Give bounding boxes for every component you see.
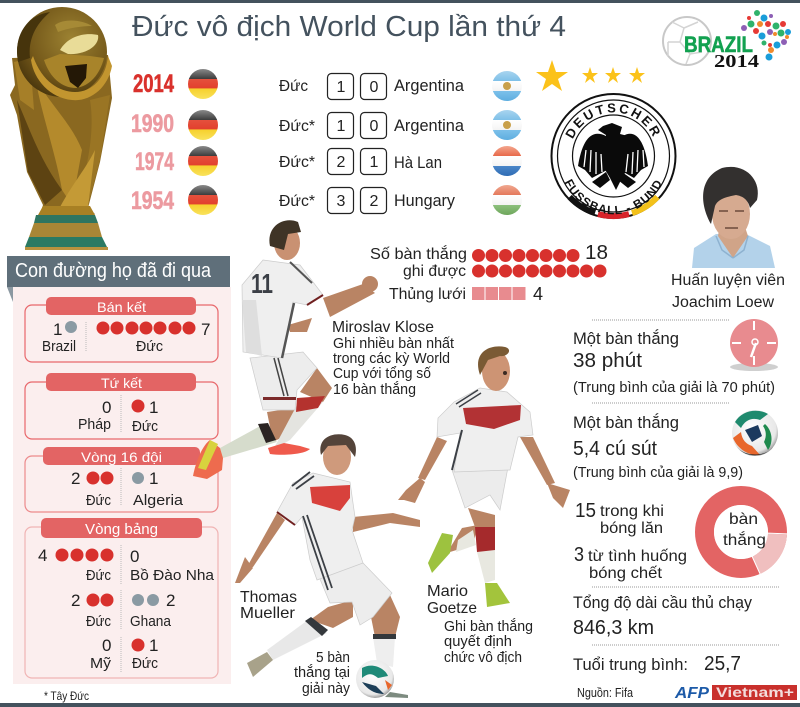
coach caption (671, 272, 785, 311)
stat: shots per goal: Một bàn thắng (573, 413, 679, 432)
2014 (133, 69, 218, 99)
semi-final: 1 (53, 320, 62, 339)
goals scored and conceded: ghi được (403, 263, 466, 280)
final 1974: 1 (370, 154, 379, 171)
photo: Miroslav Klose (193, 220, 378, 479)
group stage: 0 (130, 547, 139, 566)
goals total: 18 (585, 242, 608, 264)
round of 16: 1 (149, 469, 158, 488)
semi-final: Bán kết (97, 299, 146, 315)
round of 16: Algeria (133, 492, 184, 509)
panel heading: Con đường họ đã đi qua (15, 260, 212, 282)
conceded total: 4 (533, 284, 543, 304)
stat: minutes per goal: 38 phút (573, 349, 642, 372)
icon: stars (536, 60, 645, 91)
Klose caption: Ghi nhiều bàn nhất (333, 335, 455, 352)
final 2014 (279, 71, 522, 101)
donut chart: thắng (723, 530, 766, 549)
stat: shots per goal (573, 410, 778, 481)
goals label: Số bàn thắng (370, 244, 467, 263)
stat: minutes per goal: (Trung bình của giải là 70 phút) (573, 379, 775, 396)
Mueller caption (240, 589, 350, 697)
icon: World Cup trophy (10, 7, 112, 250)
stat: minutes per goal: Một bàn thắng (573, 329, 679, 348)
final 1990 (279, 110, 522, 140)
Goetze caption: Mario (427, 583, 468, 600)
footnote: * Tây Đức (44, 689, 89, 703)
stat: open play and set piece goals (574, 496, 790, 582)
Klose caption: Miroslav Klose (332, 319, 434, 336)
Goetze caption (427, 583, 533, 666)
title: Đức vô địch World Cup lần thứ 4 (132, 11, 566, 43)
donut chart (704, 496, 790, 576)
logo: AFP Vietnam+: Vietnam+ (716, 684, 794, 700)
icon: Brazuca ball (732, 410, 778, 456)
icon: Brazil 2014 logo: 2014 (714, 51, 759, 71)
final 1990: 1 (337, 118, 346, 135)
Mueller caption: giải này (302, 680, 350, 697)
goals scored and conceded (370, 242, 608, 304)
group stage: Bồ Đào Nha (130, 567, 215, 584)
stat: shots per goal: 5,4 cú sút (573, 437, 657, 460)
1974 (135, 146, 218, 176)
stat: average age (573, 653, 741, 675)
group stage: 2 (166, 591, 175, 610)
Klose caption: Cup với tổng số (333, 365, 432, 382)
round of 16: Vòng 16 đội (81, 449, 162, 465)
1990 (131, 110, 218, 140)
top bar (0, 0, 800, 3)
final 1954: Hungary (394, 192, 456, 210)
group stage: Đức (86, 567, 111, 584)
semi-final: Đức (136, 338, 163, 355)
logo: AFP Vietnam+ (674, 684, 797, 702)
group stage: 4 (38, 546, 47, 565)
group stage: Vòng bảng (85, 521, 158, 538)
final results table (279, 71, 522, 215)
icon: Brazil 2014 logo (663, 10, 791, 71)
stat: total distance: 846,3 km (573, 617, 654, 639)
final 2014: 0 (370, 79, 379, 96)
final 1974: Đức* (279, 154, 315, 171)
icon: Brazil 2014 logo: BRAZIL (684, 32, 753, 57)
quarter-final: 0 (102, 398, 111, 417)
bottom bar (0, 703, 800, 707)
stat: shots per goal: (Trung bình của giải là 9,9) (573, 464, 743, 481)
stat: open play and set piece goals: từ tình huống (588, 548, 687, 565)
group stage: Đức (132, 655, 158, 672)
quarter-final: Đức (132, 418, 158, 435)
icon: stopwatch (730, 319, 778, 371)
final 1954 (279, 185, 522, 215)
stat: average age: 25,7 (704, 653, 741, 675)
Goetze caption: Goetze (427, 600, 477, 617)
panel background (13, 287, 231, 684)
coach caption: Huấn luyện viên (671, 272, 785, 289)
round of 16: 2 (71, 469, 80, 488)
final 1954: 3 (337, 193, 346, 210)
final 1990: Argentina (394, 117, 465, 135)
final 1954: 2 (370, 193, 379, 210)
Mueller caption: Thomas (240, 589, 297, 606)
round of 16: Đức (86, 492, 111, 509)
photo: coach Joachim Loew (692, 167, 775, 268)
stat: open play and set piece goals: 15 (575, 500, 596, 522)
Klose caption: 16 bàn thắng (333, 381, 416, 398)
final 2014: Argentina (394, 77, 465, 95)
Goetze caption: Ghi bàn thắng (444, 618, 533, 635)
quarter-final (25, 373, 218, 439)
group stage: Đức (86, 613, 111, 630)
panel heading (7, 256, 230, 302)
semi-final: 7 (201, 320, 210, 339)
stat: open play and set piece goals: bóng lăn (600, 520, 663, 537)
final 1990: Đức* (279, 118, 315, 135)
quarter-final: Pháp (78, 416, 111, 433)
Goetze caption: chức vô địch (444, 649, 522, 666)
semi-final: Brazil (42, 338, 76, 355)
icon: DFB crest: DEUTSCHER (565, 103, 660, 139)
stat: open play and set piece goals: trong khi (600, 503, 664, 520)
group stage (25, 518, 218, 678)
goal dots (472, 249, 606, 278)
group stage: Ghana (130, 613, 172, 630)
final 1974: 2 (337, 154, 346, 171)
final 2014: Đức (279, 78, 308, 95)
semi-final (25, 297, 218, 362)
conceded label: Thủng lưới (389, 286, 466, 303)
stat: open play and set piece goals: bóng chết (589, 565, 663, 582)
stat: average age: Tuổi trung bình: (573, 656, 688, 674)
group stage: Mỹ (90, 655, 112, 672)
Mueller caption: Mueller (240, 605, 296, 622)
Klose caption: trong các kỳ World (333, 350, 450, 367)
donut chart: bàn (729, 511, 758, 528)
years with German flags (131, 69, 218, 215)
1954: 1954 (131, 187, 174, 215)
logo: AFP Vietnam+: AFP (674, 685, 709, 702)
stat: minutes per goal (573, 319, 778, 396)
photo: Thomas Mueller (235, 434, 420, 698)
panel: road to the final (7, 256, 231, 684)
final 1974: Hà Lan (394, 154, 442, 172)
photo: Mario Goetze (398, 346, 570, 607)
coach caption: Joachim Loew (672, 294, 775, 311)
1954 (131, 185, 218, 215)
group stage: 2 (71, 591, 80, 610)
icon: DFB crest: FUSSBALL - BUND (565, 178, 661, 214)
final 1954: Đức* (279, 193, 315, 210)
stat: total distance (573, 594, 753, 639)
1990: 1990 (131, 110, 174, 138)
Goetze caption: quyết định (444, 633, 512, 650)
photo: Miroslav Klose: 11 (251, 268, 273, 299)
source: Nguồn: Fifa (577, 686, 633, 700)
1974: 1974 (135, 148, 174, 176)
2014: 2014 (133, 70, 174, 98)
final 2014: 1 (337, 79, 346, 96)
quarter-final: 1 (149, 398, 158, 417)
quarter-final: Tứ kết (101, 375, 142, 391)
Mueller caption: 5 bàn (316, 649, 350, 666)
Mueller caption: thắng tại (294, 664, 350, 681)
final 1990: 0 (370, 118, 379, 135)
Klose caption (332, 319, 455, 398)
round of 16 (25, 447, 218, 512)
final 1974 (279, 146, 522, 176)
stat: open play and set piece goals: 3 (574, 544, 584, 566)
stat: total distance: Tổng độ dài cầu thủ chạy (573, 594, 753, 612)
icon: DFB crest (550, 93, 676, 220)
conceded squares (472, 287, 526, 300)
group stage: 1 (149, 636, 158, 655)
group stage: 0 (102, 636, 111, 655)
